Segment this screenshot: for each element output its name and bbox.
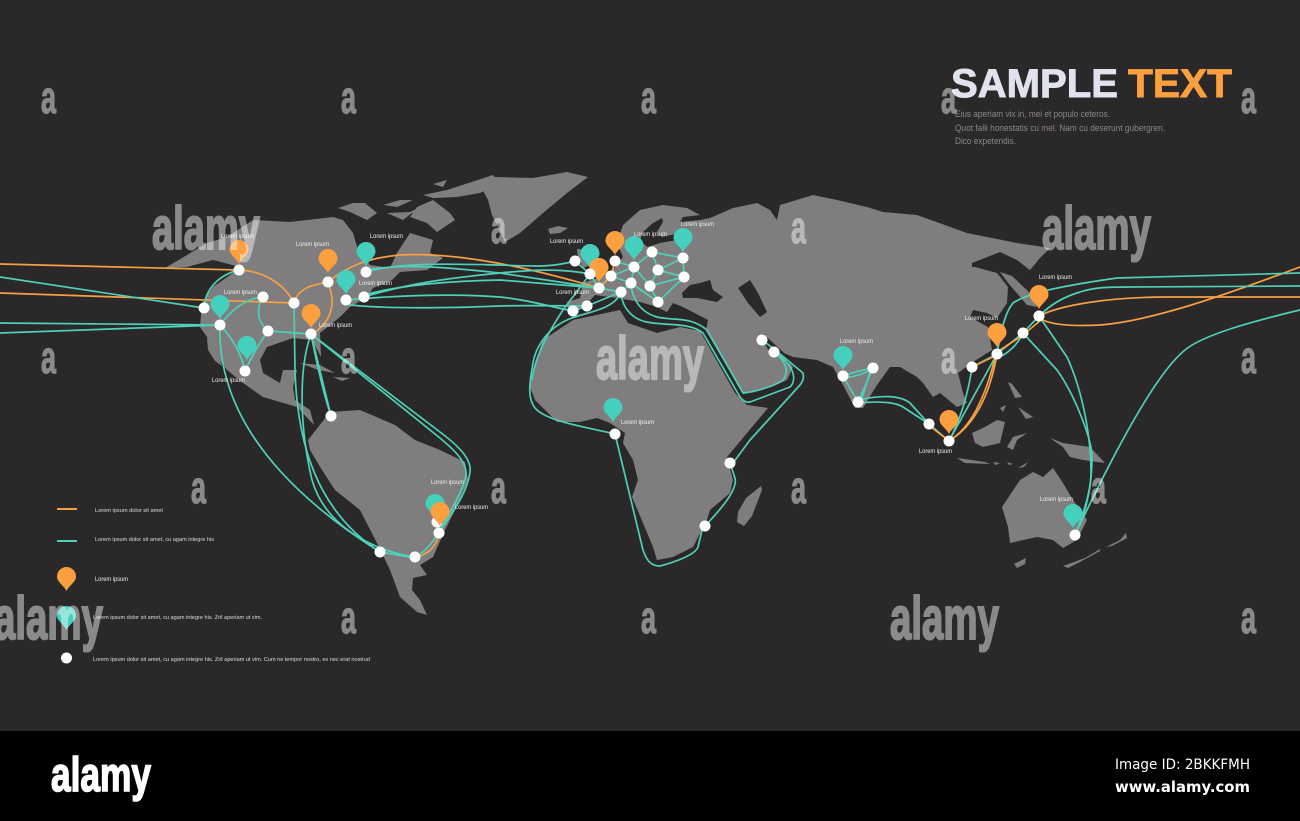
heading accent: TEXT (1128, 62, 1232, 106)
watermarks: a (341, 72, 357, 123)
watermarks: a (491, 462, 507, 513)
legend: orange pin: Lorem ipsum (95, 577, 128, 583)
watermarks: a (1241, 332, 1257, 383)
legend: white node (61, 652, 370, 664)
orange cables: Americas and Atlantic (0, 255, 599, 556)
teal cables: Europe grid (573, 252, 684, 311)
watermarks: alamy (152, 195, 260, 262)
landmass: South America (308, 410, 468, 615)
landmass: Madagascar (737, 486, 762, 526)
landmass: Baja California (207, 338, 222, 366)
landmass: Arctic islands (300, 175, 500, 381)
watermarks: a (641, 592, 657, 643)
watermarks: a (791, 462, 807, 513)
teal pins (210, 228, 1082, 528)
location labels: Lorem ipsum (634, 232, 667, 238)
orange pins (230, 231, 1048, 434)
legend: white node: Lorem ipsum dolor sit amet, cu agam integre his. Zril aperiam ut vim. Cum ne tempor nostro, ex nec erat nostrud (93, 657, 370, 663)
location labels: Lorem ipsum (840, 339, 873, 345)
legend: orange pin (57, 567, 128, 591)
alamy logo text: alamy (51, 749, 151, 802)
orange cable: Europe link (599, 261, 615, 288)
watermarks: a (1091, 462, 1107, 513)
landmass: Japan and Sakhalin (1000, 272, 1037, 307)
teal cables: Pacific and Australia (997, 273, 1300, 535)
location pins (210, 228, 1082, 528)
watermarks: a (41, 72, 57, 123)
location labels: Lorem ipsum (359, 281, 392, 287)
location labels: Lorem ipsum (1039, 275, 1072, 281)
watermarks: a (191, 462, 207, 513)
description text (955, 109, 1165, 146)
location labels: Lorem ipsum (221, 234, 254, 240)
location labels: Lorem ipsum (965, 316, 998, 322)
landmass: Australia (1002, 468, 1087, 548)
legend: teal line: Lorem ipsum dolor sit amet, cu agam integre his (95, 537, 214, 543)
description text: Eius aperiam vix in, mei et populo ceteros. (955, 109, 1110, 119)
teal cables: Americas (0, 270, 470, 558)
description text: Dico expetendis. (955, 136, 1016, 146)
watermarks: a (941, 332, 957, 383)
landmass: Africa (530, 310, 768, 560)
pins drawn over teal neighbours (430, 258, 608, 528)
landmass: North America (165, 217, 443, 425)
location labels (212, 222, 1073, 511)
location labels: Lorem ipsum (212, 378, 245, 384)
world map landmasses (165, 172, 1127, 615)
sea: Caspian (738, 280, 767, 317)
landmass: Iceland (548, 226, 568, 234)
location labels: Lorem ipsum (370, 234, 403, 240)
watermarks: a (1241, 592, 1257, 643)
location labels: Lorem ipsum (455, 505, 488, 511)
watermarks: a (1241, 72, 1257, 123)
location labels: Lorem ipsum (431, 480, 464, 486)
legend (57, 508, 370, 664)
location labels: Lorem ipsum (556, 290, 589, 296)
title block (951, 62, 1232, 146)
heading: SAMPLE (951, 62, 1118, 106)
website: www.alamy.com (1115, 778, 1250, 796)
watermarks: a (941, 72, 957, 123)
description text: Quot falli honestatis cu mel. Nam cu deserunt gubergren. (955, 123, 1165, 133)
watermarks: a (41, 332, 57, 383)
location labels: Lorem ipsum (296, 242, 329, 248)
landmass: United Kingdom (577, 249, 597, 268)
sea: Baltic (640, 218, 680, 247)
watermarks: alamy (1042, 195, 1151, 262)
sea: Red Sea and gulfs (702, 329, 790, 397)
location labels: Lorem ipsum (550, 239, 583, 245)
location labels: Lorem ipsum (621, 420, 654, 426)
teal cables: Atlantic crossing (346, 261, 599, 311)
teal cables: around Africa (530, 274, 735, 566)
image id: Image ID: 2BKKFMH (1115, 757, 1250, 773)
watermarks: a (791, 202, 807, 253)
watermarks: a (341, 332, 357, 383)
location labels: Lorem ipsum (1040, 497, 1073, 503)
landmass: Eurasia (567, 195, 1050, 408)
watermarks: a (341, 592, 357, 643)
landmass: Tasmania and New Zealand (1014, 533, 1127, 568)
watermarks: a (641, 72, 657, 123)
network nodes (198, 246, 1080, 562)
location labels: Lorem ipsum (224, 290, 257, 296)
watermarks: alamy (596, 325, 704, 392)
location labels: Lorem ipsum (681, 222, 714, 228)
location labels: Lorem ipsum (319, 323, 352, 329)
landmass: Greenland (480, 172, 588, 242)
watermarks: alamy (890, 585, 999, 652)
legend: orange line (57, 508, 163, 514)
legend: teal pin: Lorem ipsum dolor sit amet, cu agam integre his. Zril aperiam ut vim. (93, 615, 262, 621)
bottom credit bar (0, 731, 1300, 821)
legend: teal pin (57, 606, 262, 630)
orange cables: East Asia (931, 267, 1300, 441)
location labels: Lorem ipsum (919, 449, 952, 455)
sea: Black Sea (682, 280, 723, 302)
teal cables: India to Southeast Asia (843, 316, 1039, 441)
watermarks (0, 72, 1257, 652)
cable network lines (0, 252, 1300, 566)
landmass: Southeast Asia islands (957, 382, 1105, 468)
watermarks: a (491, 202, 507, 253)
legend: orange line: Lorem ipsum dolor sit amet (95, 508, 163, 514)
teal cables: Mediterranean, Red Sea and Gulf (621, 285, 803, 463)
